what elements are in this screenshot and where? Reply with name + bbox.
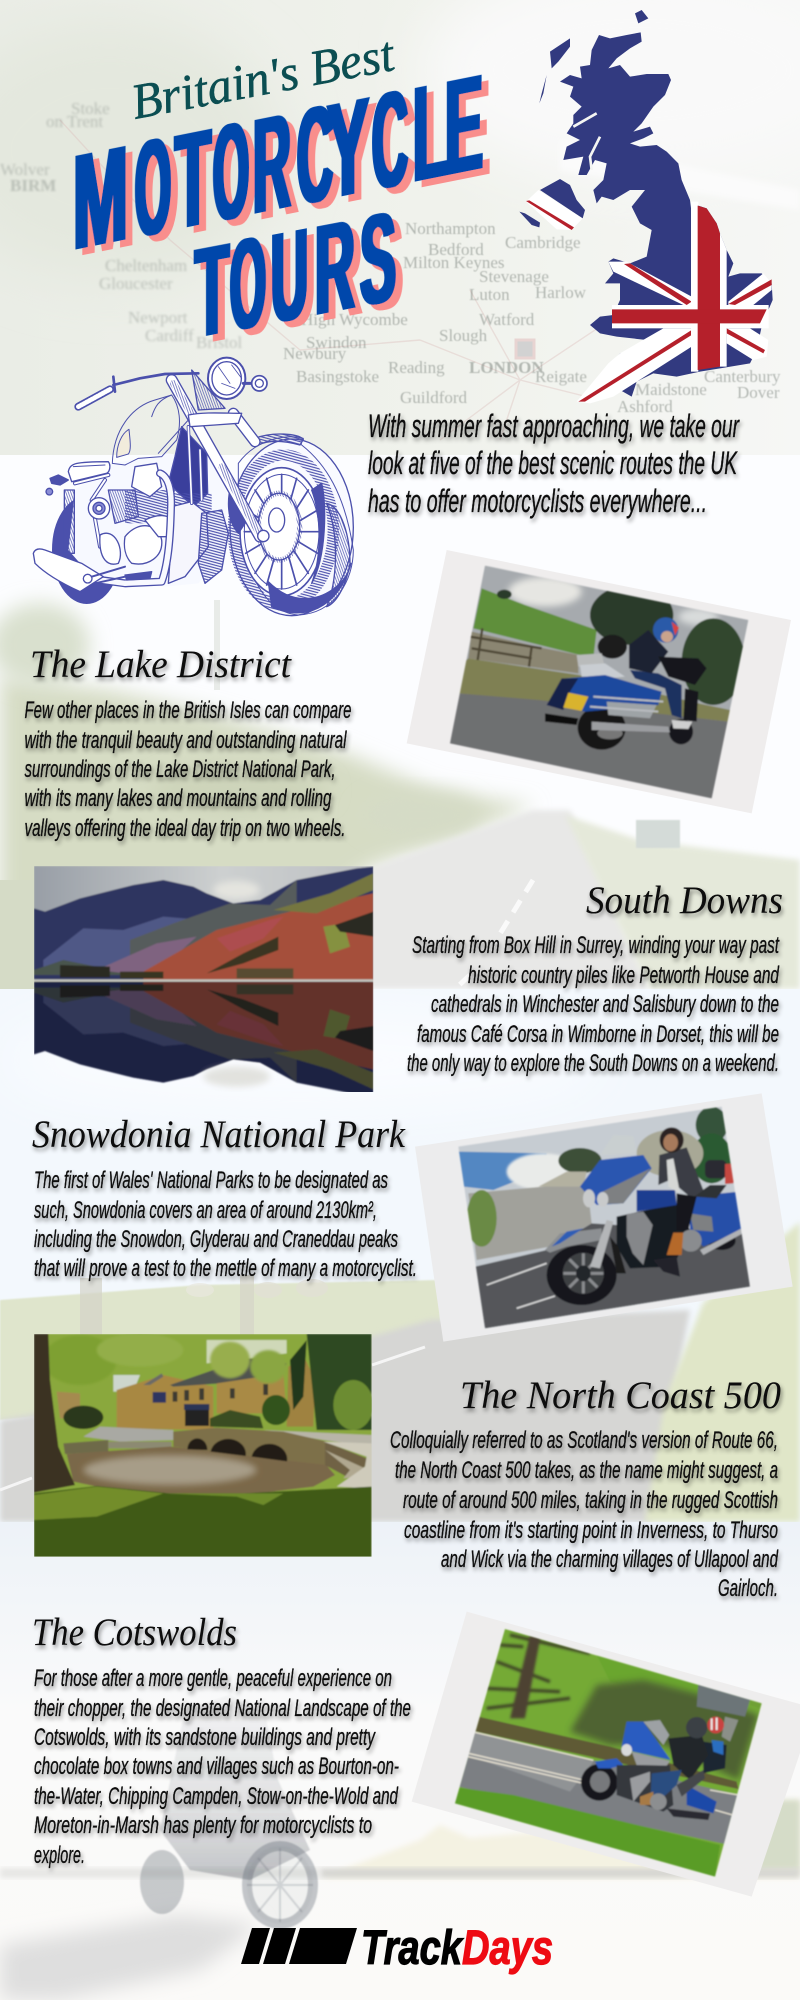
text: Lake District description: surroundings of the Lake District National Park, [24,756,336,783]
background: road atlas map: Slough [439,326,488,345]
map of the UK with union flag [519,10,773,403]
text: Cotswolds description: chocolate box towns and villages such as Bourton-on- [34,1753,399,1780]
headline: Tours: R [315,193,355,343]
background: road atlas map: Cardiff [145,326,194,345]
text: Cotswolds description: their chopper, the designated National Landscape of the [34,1695,411,1722]
background: hillside road scene [0,594,800,989]
section: The North Coast 500 [390,1374,781,1602]
background: road atlas map: Bristol [196,333,243,352]
text: Snowdonia description [34,1167,417,1282]
text: North Coast 500 description [390,1427,778,1602]
background: sheep field and road scene [0,989,800,1522]
background: road atlas map: Milton Keynes [403,253,505,272]
background: road atlas map: Cheltenham [105,256,187,275]
infographic canvas: E [445,46,483,205]
Northern Ireland with flag stripes [519,179,585,230]
background: road atlas map: Reigate [535,367,587,386]
background: road atlas map: BIRM [10,176,56,195]
logo: TrackDays: Track [361,1922,464,1975]
logo: TrackDays: Days [462,1922,553,1975]
background: road atlas map: LONDON [469,358,544,377]
background: road atlas map: Cambridge [505,233,581,252]
text: Cotswolds description: For those after a more gentle, peaceful experience on [34,1665,392,1692]
photo card: two riders cornering on a country road [412,1612,800,1897]
title lettering [73,25,483,366]
background: road atlas map: Wolver [0,160,50,179]
background: road atlas map: Luton [469,285,510,304]
text: Lake District description [24,697,352,842]
text: Cotswolds description: the-Water, Chipping Campden, Stow-on-the-Wold and [34,1783,398,1810]
text: Cotswolds description: Cotswolds, with its sandstone buildings and pretty [34,1724,376,1751]
background: road atlas map: Reading [388,358,445,377]
section: South Downs [407,879,783,1077]
headline: Motorcycle: R [253,85,291,244]
background: road atlas map: Gloucester [99,274,173,293]
heading: The Cotswolds: The Cotswolds [32,1611,237,1654]
illustration: blue line-art motorcycle [33,358,353,616]
heading: South Downs: South Downs [586,879,783,922]
background: road atlas map: Ashford [617,397,673,416]
text: Cotswolds description: explore. [34,1842,85,1869]
background: road atlas map: on Trent [46,112,103,131]
background: road atlas map: Bedford [428,240,484,259]
heading: Snowdonia National Park: Snowdonia National Park [32,1113,406,1156]
background: road atlas map: Basingstoke [296,367,379,386]
section: Snowdonia National Park [32,1113,417,1282]
union flag over England [577,202,772,403]
Great Britain outline [539,10,773,397]
background: road atlas map: Maidstone [635,380,707,399]
headline: Tours: O [230,210,266,359]
headline: Tours [195,185,396,366]
text: Lake District description: with its many lakes and mountains and rolling [24,785,332,812]
headline: Motorcycle: T [175,101,211,259]
text: Lake District description: Few other places in the British Isles can compare [24,697,352,724]
background: road atlas map: Stevenage [479,267,549,286]
background: road atlas map: Guildford [400,388,468,407]
headline: Motorcycle [73,46,483,280]
headline: Motorcycle: Y [327,69,369,229]
headline: Motorcycle: L [413,53,447,212]
headline: Motorcycle: O [213,93,249,252]
headline: Motorcycle: M [73,117,128,280]
background: road atlas map: Dover [737,383,780,402]
background: road atlas map: Swindon [306,333,367,352]
photo: Cotswolds village with stone bridge [34,1333,373,1557]
headline: Motorcycle: C [297,76,333,235]
background: rider on coast road scene [0,1522,800,2000]
background: road atlas map: Harlow [535,283,587,302]
photo card: rider on blue touring bike by a field [407,550,791,813]
background: road atlas map: Stoke [71,99,110,118]
text: Snowdonia description: such, Snowdonia covers an area of around 2130km², [34,1197,377,1224]
background: road atlas map: Canterbury [704,367,781,386]
section: The Cotswolds [32,1611,411,1869]
intro text [368,408,740,519]
logo: TrackDays [241,1922,553,1975]
photo: Buttermere lake mountains and reflection [34,866,374,1096]
headline: Motorcycle: O [135,109,171,267]
heading: The North Coast 500: The North Coast 500 [460,1374,781,1417]
photo card: rider sitting on blue touring bike [415,1093,793,1342]
headline: Tours: U [271,202,308,351]
subtitle: Britain's Best: Britain's Best [127,25,399,130]
background: road atlas map [0,0,800,455]
heading: The Lake District: The Lake District [30,643,292,686]
text: Snowdonia description: including the Snowdon, Glyderau and Craneddau peaks [34,1226,398,1253]
text: Cotswolds description [34,1665,411,1869]
text: Snowdonia description: that will prove a test to the mettle of many a motorcyclist. [34,1255,417,1282]
text: South Downs description [407,932,780,1077]
background: road atlas map: High Wycombe [301,310,408,329]
title lettering: S [360,185,396,334]
text: Cotswolds description: Moreton-in-Marsh has plenty for motorcyclists to [34,1812,372,1839]
text: Lake District description: with the tranquil beauty and outstanding natural [24,727,347,754]
headline: Motorcycle: C [372,61,408,220]
headline: Tours: T [195,217,229,366]
section: The Lake District [24,643,352,842]
background: road atlas map: Watford [479,310,535,329]
background: road atlas map: Northampton [405,219,496,238]
text: Snowdonia description: The first of Wales' National Parks to be designated as [34,1167,388,1194]
background: road atlas map: Newport [128,308,188,327]
background: road atlas map: Newbury [283,344,347,363]
text: Lake District description: valleys offering the ideal day trip on two wheels. [24,815,346,842]
